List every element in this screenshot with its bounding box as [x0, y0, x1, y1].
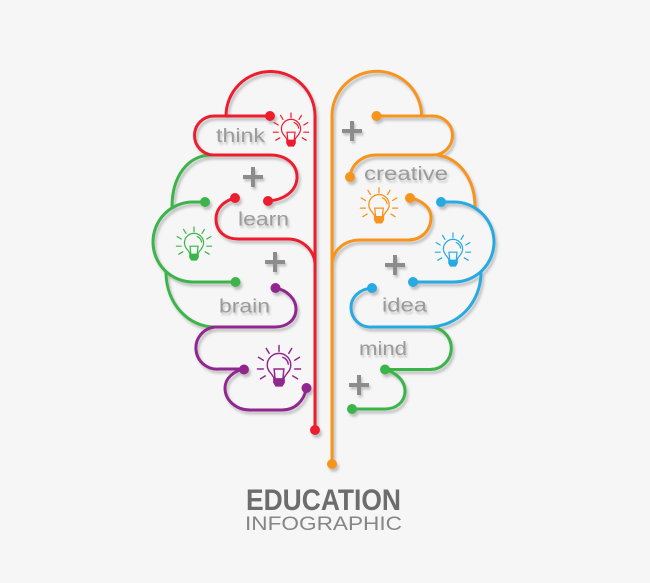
orange right stem and branches [327, 71, 475, 469]
word labels: idea [382, 296, 428, 316]
green lower-right branch [347, 327, 451, 414]
word labels [216, 126, 448, 360]
word labels: learn [238, 210, 289, 230]
word labels: creative [364, 164, 448, 185]
word labels: think [216, 126, 266, 147]
icon: red light bulb [273, 113, 309, 147]
word labels: mind [359, 339, 407, 360]
word labels: brain [219, 296, 270, 318]
icon: orange light bulb [360, 188, 398, 223]
subtitle: INFOGRAPHIC [245, 513, 402, 535]
title: EDUCATION [246, 484, 401, 517]
brain line network [153, 71, 494, 469]
purple branch [196, 283, 312, 410]
icon: green light bulb [176, 227, 212, 261]
icon: blue light bulb [435, 233, 471, 267]
icon: purple light bulb [257, 346, 301, 387]
green upper-left branch [153, 155, 240, 327]
blue branch [351, 197, 494, 327]
plus signs [243, 121, 405, 395]
red left stem and branches [195, 72, 320, 435]
